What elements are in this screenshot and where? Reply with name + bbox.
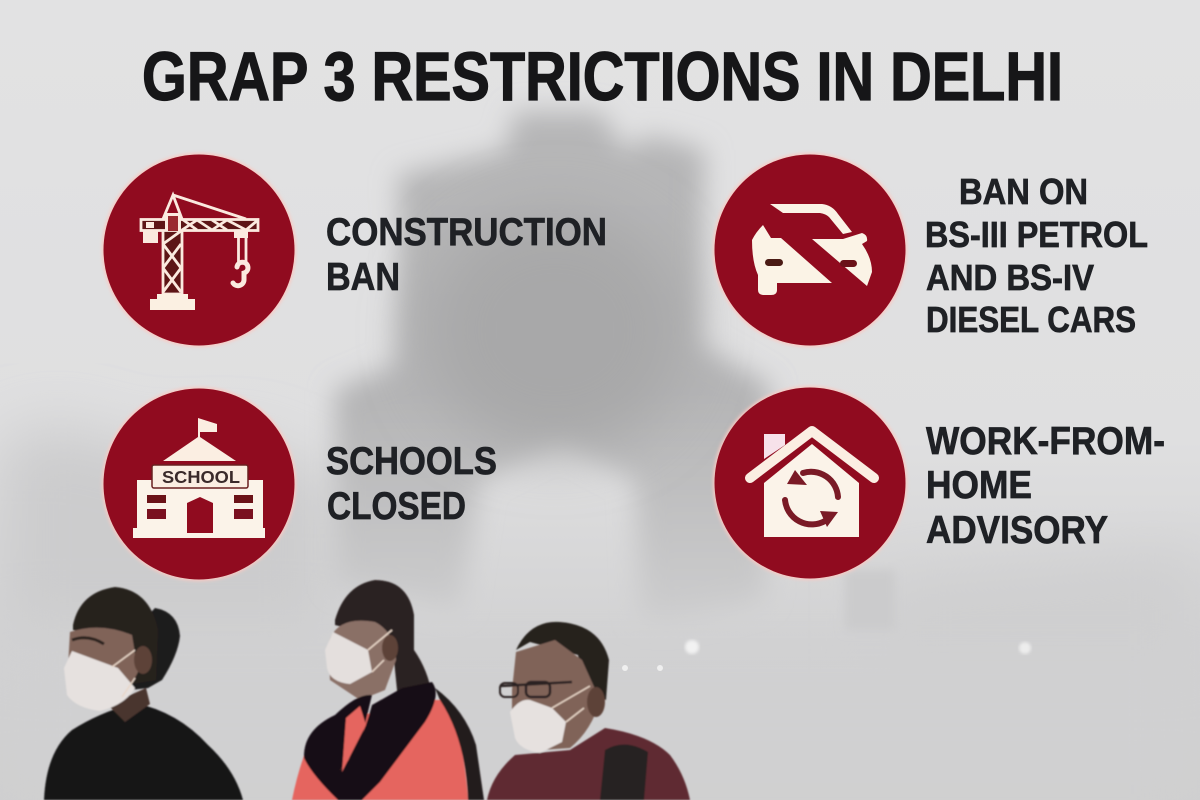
people: woman with red dress and black scarf bbox=[292, 580, 484, 800]
text: work-from-home advisory bbox=[926, 420, 1165, 552]
text: work-from-home advisory: ADVISORY bbox=[926, 509, 1108, 552]
icon: banned car badge bbox=[713, 153, 907, 347]
text: construction ban bbox=[326, 211, 607, 299]
text: ban on BS-III petrol and BS-IV diesel cars bbox=[925, 171, 1148, 340]
text: ban on BS-III petrol and BS-IV diesel cars: DIESEL CARS bbox=[926, 299, 1136, 340]
text: schools closed: CLOSED bbox=[327, 485, 466, 528]
text: work-from-home advisory: WORK-FROM- bbox=[926, 420, 1165, 463]
icon: work from home badge bbox=[713, 386, 907, 580]
text: ban on BS-III petrol and BS-IV diesel cars: BAN ON bbox=[959, 171, 1088, 212]
text: construction ban: BAN bbox=[326, 256, 400, 299]
text: ban on BS-III petrol and BS-IV diesel cars: BS-III PETROL bbox=[925, 214, 1148, 255]
text: work-from-home advisory: HOME bbox=[926, 464, 1032, 507]
text: construction ban: CONSTRUCTION bbox=[326, 211, 607, 254]
icon: school badge bbox=[102, 387, 296, 581]
people: man with glasses bbox=[487, 622, 690, 800]
text: schools closed bbox=[326, 440, 497, 528]
text: schools closed: SCHOOLS bbox=[326, 440, 497, 483]
icon: school badge: SCHOOL bbox=[162, 467, 240, 487]
people: woman in black bbox=[44, 587, 243, 800]
icon: construction crane badge bbox=[102, 153, 296, 347]
text: ban on BS-III petrol and BS-IV diesel cars: AND BS-IV bbox=[926, 257, 1094, 298]
